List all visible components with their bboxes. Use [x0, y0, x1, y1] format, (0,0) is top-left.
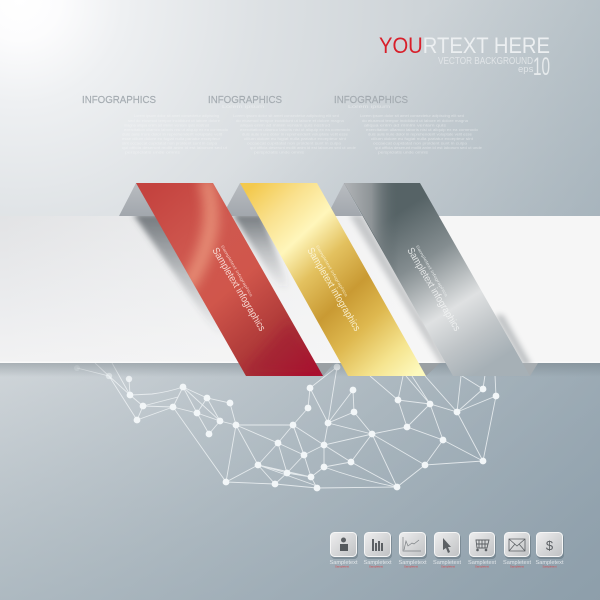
icon: cursor arrow: Sampletext: [441, 564, 455, 568]
icon: dollar sign: [536, 532, 564, 568]
body text: column 3: perspiciatis unde omnis: [378, 150, 429, 154]
network mesh: [74, 363, 499, 491]
body text: column 3: occaecat cupidatat non proident sunt in culpa: [373, 142, 467, 146]
icon: line chart: [398, 532, 427, 568]
heading: infographics 3: INFOGRAPHICS: [334, 94, 408, 106]
body text: column 3: do eiusmod tempor incididunt ut labore et dolore magna: [362, 119, 468, 123]
body text: column 1: sint occaecat cupidatat non proident sunt in culpa: [122, 142, 217, 146]
folded-behind gray triangles: [119, 183, 362, 216]
icon: envelope: Sampletext: [503, 560, 531, 566]
body text: column 3: Lorem ipsum: [348, 104, 390, 109]
body text: column 3: duis aute irure dolor in reprehenderit voluptate velit esse: [368, 132, 472, 136]
body text: column 2: Lorem ipsum dolor sit amet consectetur adipiscing elit sed: [233, 114, 339, 118]
red ribbon: [136, 178, 330, 376]
body text: column 1: esse cillum dolore eu fugiat nulla pariatur excepteur: [122, 137, 221, 141]
body text: column 2: occaecat cupidatat non proident sunt in culpa: [247, 142, 341, 146]
triangle behind gold ribbon: [222, 183, 262, 216]
body text: column 2: exercitation ullamco laboris nisi ut aliquip ex ea commodo: [240, 128, 350, 132]
body text: column 2: do eiusmod tempor incididunt ut labore et dolore magna: [236, 119, 344, 123]
icon: shopping cart: Sampletext: [468, 560, 496, 566]
body text: column 1: Lorem ipsum dolor sit amet consectetur adipiscing: [134, 114, 219, 118]
gold ribbon text: Sampletext infographics: [315, 244, 349, 297]
body text: column 1: sed do eiusmod tempor incididunt ut labore dolore: [128, 119, 220, 123]
icon: cursor arrow: Sampletext: [433, 560, 461, 566]
icon: envelope: [503, 532, 531, 568]
icon: bar chart: Sampletext: [369, 564, 383, 568]
gold ribbon text: Sampletext infographics: [304, 246, 362, 333]
icon: person: Sampletext: [330, 560, 358, 566]
triangle behind red ribbon: [119, 183, 160, 216]
subheading: vector background: VECTOR BACKGROUND: [438, 56, 533, 67]
icon: cursor arrow: [433, 532, 461, 568]
heading: infographics 1: INFOGRAPHICS: [82, 94, 156, 106]
heading: your text here: YOURTEXT HERE: [379, 33, 550, 58]
icon: envelope: Sampletext: [510, 564, 524, 568]
icon: line chart: Sampletext: [398, 560, 427, 566]
body text: column 1: qui officia deserunt mollit anim id est laborum sed ut: [122, 146, 227, 150]
steel ribbon: [344, 183, 530, 376]
body text: column 2: duis aute irure dolor in reprehenderit voluptate velit esse: [242, 132, 348, 136]
title block: [379, 33, 550, 81]
body text: column 1: perspiciatis unde omnis: [125, 150, 181, 154]
icon: bar chart: Sampletext: [364, 560, 392, 566]
body text: column 3: qui officia deserunt mollit anim id est laborum sed ut unde: [375, 146, 482, 150]
gold ribbon: [240, 183, 426, 376]
icon: bar chart: [364, 532, 392, 568]
body text: column 3: cillum dolore eu fugiat nulla pariatur excepteur sint: [371, 137, 473, 141]
body text: column 3: Lorem ipsum dolor sit amet consectetur adipiscing elit sed: [360, 114, 464, 118]
heading: infographics 2: INFOGRAPHICS: [208, 94, 282, 106]
body text: column 3: [348, 104, 482, 154]
icon: dollar sign: $: [546, 538, 554, 553]
body text: column 1: duis aute irure dolor in reprehenderit voluptate velit: [122, 132, 222, 136]
ribbon shadows on band: [133, 214, 532, 366]
body text: column 2: cillum dolore eu fugiat nulla pariatur excepteur sint: [244, 137, 346, 141]
body text: column 1: magna aliqua enim ad minim veniam quis nostrud: [124, 124, 209, 128]
body text: column 2: aliqua enim ad minim veniam quis nostrud: [240, 124, 330, 128]
icon: shopping cart: Sampletext: [475, 564, 489, 568]
body text: column 2: qui officia deserunt mollit anim id est laborum sed ut unde: [250, 146, 356, 150]
body text: column 3: aliqua enim ad minim veniam quis: [364, 124, 447, 128]
icon: line chart: Sampletext: [404, 564, 418, 568]
mesh lines: [77, 363, 496, 488]
eps label: eps: [518, 64, 534, 75]
body text: column 1: [122, 114, 228, 154]
mesh nodes: [74, 364, 499, 491]
icon: dollar sign: Sampletext: [542, 564, 557, 568]
steel ribbon text: Sampletext infographics: [415, 244, 449, 297]
steel ribbon sheen: [344, 183, 400, 280]
red ribbon text: Sampletext infographics: [220, 244, 254, 297]
red ribbon text: Sampletext infographics: [209, 246, 267, 333]
triangle behind steel ribbon: [327, 183, 362, 216]
icon: person: Sampletext: [335, 564, 349, 568]
body text: column 2: perspiciatis unde omnis: [254, 150, 305, 154]
white horizontal band: [0, 216, 600, 377]
icon: shopping cart: [468, 532, 496, 568]
column headings and faint body text: [82, 94, 482, 154]
body text: column 1: exercitation ullamco laboris nisi ut aliquip ex ea commodo: [124, 128, 228, 132]
version number 10: 10: [533, 53, 550, 81]
icon row: [330, 532, 564, 568]
steel ribbon text: Sampletext infographics: [404, 246, 462, 333]
icon: dollar sign: Sampletext: [536, 560, 564, 566]
icon: person: [330, 532, 358, 568]
highlight on red ribbon: [186, 178, 330, 376]
body text: column 2: [222, 104, 356, 154]
body text: column 3: exercitation ullamco laboris nisi ut aliquip ex ea commodo: [366, 128, 478, 132]
fold tails below band: [311, 363, 538, 376]
body text: column 2: Lorem ipsum: [222, 104, 264, 109]
